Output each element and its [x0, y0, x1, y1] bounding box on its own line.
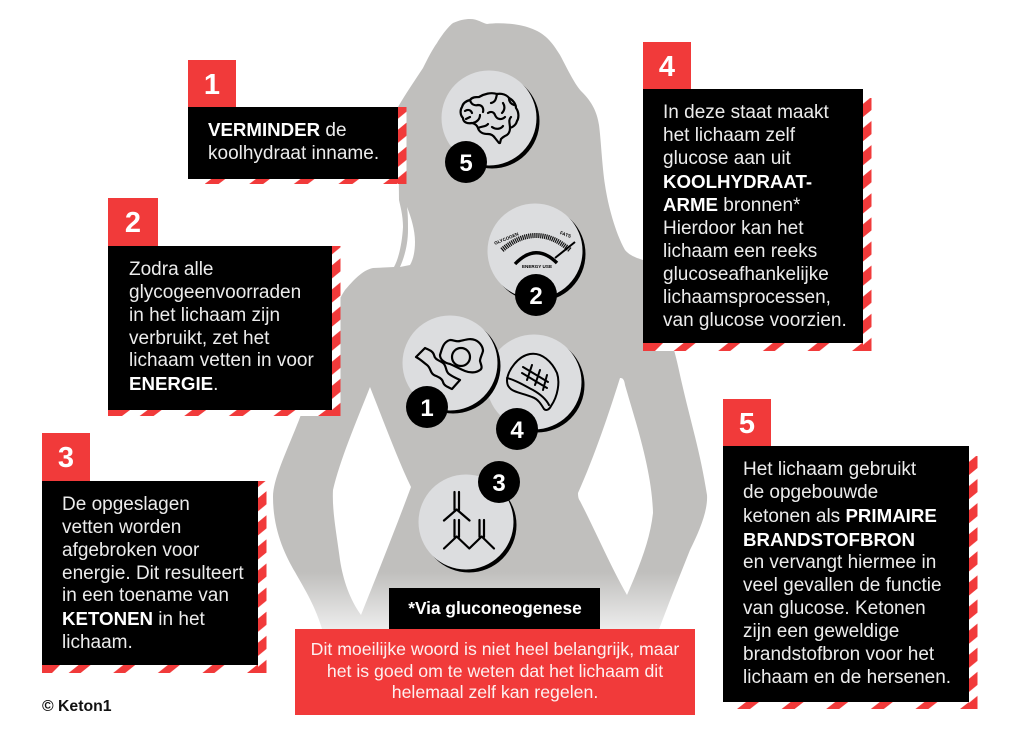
number 1: 1: [204, 69, 220, 101]
text: step 1: VERMINDER de: [208, 119, 347, 141]
panel: step 5: [723, 399, 978, 709]
text: step 2: [129, 259, 314, 395]
text: step 4: In deze staat maakt: [663, 102, 829, 123]
text: step 4: glucoseafhankelijke: [663, 264, 829, 285]
text: step 5: zijn een geweldige: [743, 621, 899, 642]
text: step 4: het lichaam zelf: [663, 125, 795, 146]
number badge 4: [496, 408, 538, 450]
text: step 2: in het lichaam zijn: [129, 305, 280, 326]
number badge 3: 3: [492, 470, 506, 497]
number badge 3: [478, 461, 520, 503]
text: step 3: KETONEN in het: [62, 608, 205, 630]
number badge 2: 2: [529, 283, 543, 310]
text: step 5: ketonen als PRIMAIRE: [743, 505, 937, 527]
text: step 4: lichaam een reeks: [663, 241, 817, 262]
number badge 4: 4: [510, 417, 524, 444]
number 1: [188, 60, 236, 107]
icon: energy gauge circle 2: FATS: [559, 230, 572, 239]
icon: energy gauge circle 2: ENERGY USE: [522, 264, 552, 269]
label: via gluconeogenese: *Via gluconeogenese: [408, 598, 582, 618]
text: step 5: Het lichaam gebruikt: [743, 459, 916, 480]
text: step 3: in een toename van: [62, 585, 229, 606]
credit: © Keton1: [42, 698, 112, 715]
text: step 4: Hierdoor kan het: [663, 218, 803, 239]
panel: step 2: [108, 198, 340, 416]
number 2: 2: [125, 207, 141, 239]
number 5: [723, 399, 771, 446]
callout: gluconeogenese explanation: het is goed om te weten dat het lichaam dit: [327, 660, 663, 680]
text: step 5: van glucose. Ketonen: [743, 598, 926, 619]
text: step 3: energie. Dit resulteert: [62, 563, 244, 584]
text: step 3: [62, 494, 244, 653]
text: step 2: ENERGIE.: [129, 373, 218, 395]
number badge 1: [406, 386, 448, 428]
callout: gluconeogenese explanation: [295, 629, 695, 715]
text: step 4: glucose aan uit: [663, 148, 791, 169]
panel: step 4: [643, 42, 872, 351]
text: step 4: [663, 102, 847, 331]
number badge 5: 5: [459, 150, 473, 177]
number 3: 3: [58, 442, 74, 474]
text: step 3: De opgeslagen: [62, 494, 190, 515]
text: step 2: glycogeenvoorraden: [129, 282, 301, 303]
number 2: [108, 198, 158, 246]
label: via gluconeogenese: [389, 588, 600, 629]
text: step 5: brandstofbron voor het: [743, 644, 934, 665]
text: step 4: ARME bronnen*: [663, 194, 800, 216]
text: step 4: KOOLHYDRAAT-: [663, 171, 812, 192]
text: step 3: afgebroken voor: [62, 540, 199, 561]
number 4: 4: [659, 51, 675, 83]
number 5: 5: [739, 408, 755, 440]
callout: gluconeogenese explanation: Dit moeilijke woord is niet heel belangrijk, maar: [311, 639, 679, 659]
text: step 5: lichaam en de hersenen.: [743, 667, 951, 688]
text: step 2: verbruikt, zet het: [129, 328, 269, 349]
number 4: [643, 42, 691, 89]
text: step 2: lichaam vetten in voor: [129, 350, 314, 371]
text: step 4: van glucose voorzien.: [663, 310, 847, 331]
icon: energy gauge circle 2: GLYCOGEN: [494, 231, 520, 246]
number badge 1: 1: [420, 395, 434, 422]
text: step 5: en vervangt hiermee in: [743, 552, 936, 573]
text: step 3: vetten worden: [62, 517, 181, 538]
text: step 5: [743, 459, 951, 688]
number badge 2: [515, 274, 557, 316]
text: step 2: Zodra alle: [129, 259, 214, 280]
number badge 5: [445, 141, 487, 183]
text: step 1: koolhydraat inname.: [208, 143, 379, 164]
text: step 5: de opgebouwde: [743, 482, 878, 503]
panel: step 1: [188, 60, 406, 184]
text: step 5: BRANDSTOFBRON: [743, 529, 915, 550]
callout: gluconeogenese explanation: helemaal zelf kan regelen.: [392, 682, 598, 702]
number 3: [42, 433, 90, 481]
text: step 5: veel gevallen de functie: [743, 575, 942, 596]
text: step 4: lichaamsprocessen,: [663, 287, 831, 308]
text: step 1: [208, 119, 379, 164]
panel: step 3: [42, 433, 266, 673]
text: step 3: lichaam.: [62, 632, 133, 653]
